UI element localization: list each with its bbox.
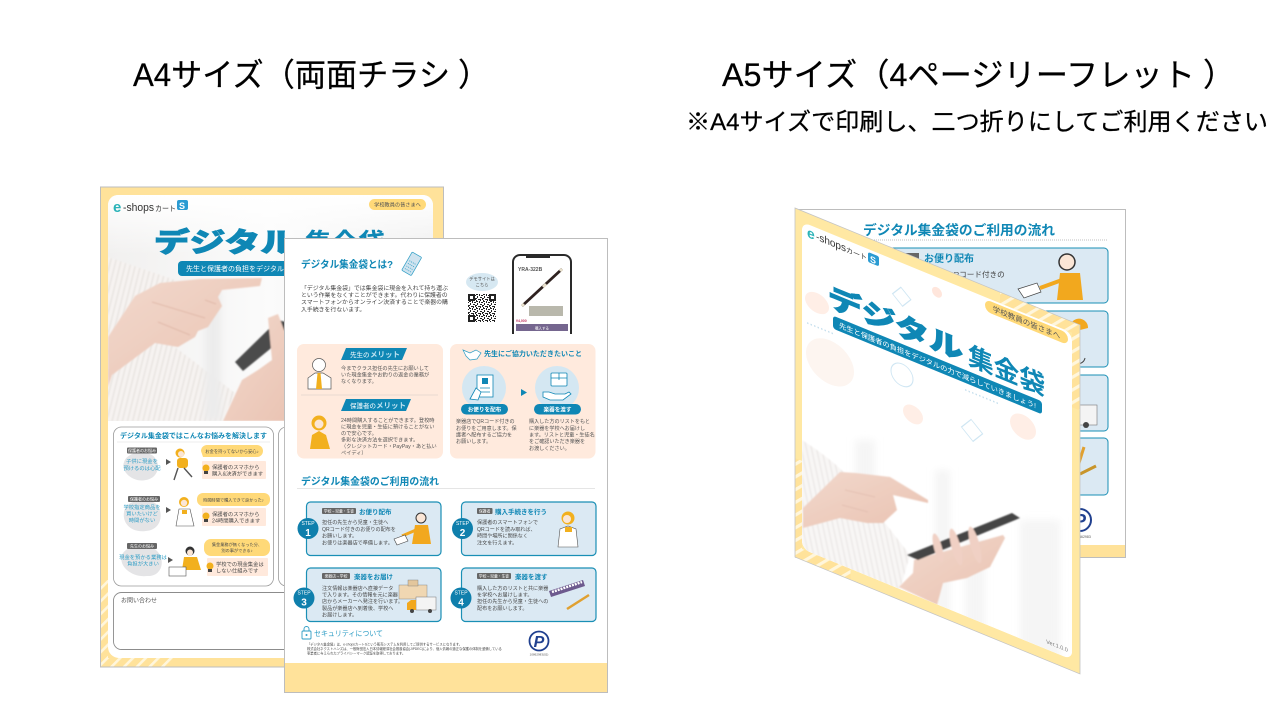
row: teacher worry: 現金を預かる業務は [119, 553, 168, 561]
heading: digital shukin-bukuro [154, 227, 385, 259]
card: step 1 [875, 248, 1108, 303]
step badge 1: STEP [301, 521, 315, 527]
step badge 3: 3 [301, 598, 307, 608]
banner: subtitle: 先生と保護者の負担をデジタルの力で減らしていきましょう! [186, 264, 377, 273]
title: A5 heading: ） [1203, 57, 1235, 93]
panel: teacher cooperation: お渡しください。 [529, 445, 570, 452]
row: teacher worry: しない仕組みです [216, 566, 258, 574]
row: parent worry 2: 24時間購入できます [212, 516, 260, 524]
card: step 1: お便り配布 [924, 252, 974, 265]
heading: security: セキュリティについて [314, 629, 383, 638]
logo: e-shops cart [807, 225, 879, 270]
row: teacher worry: 学校での現金集金は [216, 560, 264, 568]
card: step 4: 購入した方のリストと共に楽器 [477, 585, 548, 592]
panel: teacher cooperation: お願いします。 [456, 438, 491, 445]
heading: problems: デジタル集金袋ではこんなお悩みを解決します [120, 431, 267, 440]
icon: melodica and recorder [549, 580, 589, 609]
icon: privacy mark: P [1074, 511, 1087, 531]
banner: parent merit [341, 399, 411, 411]
logo: e-shops cart: S [179, 201, 185, 211]
banner: parent merit: 保護者の [350, 401, 376, 410]
banner: parent merit: メリット [376, 401, 406, 410]
row: parent worry 2: 保護者のスマホから [212, 510, 260, 518]
step badge 2: STEP [456, 521, 470, 527]
card: step 2: 保護者 [479, 509, 491, 514]
row: parent worry 2: 時間がない [129, 516, 155, 524]
row: parent worry 1: 保護者のスマホから [212, 463, 260, 471]
panel: teacher cooperation: お便りをご用意します。保 [456, 425, 517, 432]
arrow [521, 389, 527, 396]
row: parent worry 1: 購入&決済ができます [212, 470, 263, 478]
row: teacher worry: 負担が大きい [127, 560, 159, 568]
panel: teacher cooperation: 購入した方のリストをもと [529, 418, 590, 425]
row: parent worry 2: 保護者のお悩み [130, 496, 158, 502]
logo: e-shops cart: カート [155, 204, 176, 213]
callout: demo site bubble [466, 273, 498, 291]
logo: e-shops cart: e [807, 225, 815, 244]
icon: male teacher [308, 358, 331, 389]
panel: A4 front sheet [100, 187, 444, 667]
panel: merits: 今までクラス担任の先生にお願いして [341, 364, 429, 372]
row: parent worry 1: 子供に現金を [126, 457, 158, 465]
icon: woman with phone [558, 512, 578, 547]
panel: contact box: お問い合わせ [121, 596, 157, 604]
tag: for school teachers: 学校教員の皆さまへ [993, 304, 1060, 341]
heading: digital shukin-bukuro: 集金袋 [968, 340, 1045, 401]
tag: for school teachers [369, 199, 426, 210]
card: step 3: で入ります。その情報を元に楽器 [322, 592, 398, 598]
row: parent worry 1: 保護者のお悩み [128, 447, 156, 453]
smartphone mockup: YRA-322B [518, 267, 543, 273]
heading: digital shukin-bukuro: デジタル [154, 227, 296, 258]
row: teacher worry: 集金業務が無くなった分、 [212, 541, 262, 548]
panel: teacher cooperation [450, 344, 596, 458]
text: security note: 「デジタル集金袋」は、e-shopsカートSという販売システムを利用してご提供するサービスになります。 [307, 642, 462, 646]
card: step 3: 製品が楽器店へ到着後、学校へ [322, 605, 393, 612]
icon: lock [302, 626, 311, 639]
card: step 4 [875, 438, 1108, 495]
banner: teacher merit: メリット [370, 350, 400, 359]
heading: usage flow: デジタル集金袋のご利用の流れ [301, 475, 439, 488]
tag: for school teachers: 学校教員の皆さまへ [374, 200, 421, 208]
card: step 2 [875, 311, 1108, 367]
step: hand over instrument: 楽器を渡す [544, 406, 572, 414]
icon: handshake [463, 350, 481, 360]
panel: merits: 24時間購入することができます。登校時 [341, 416, 434, 424]
step badge 4: STEP [454, 590, 468, 596]
panel: merits: いた現金集金やお釣りの返金の業務が [341, 370, 430, 378]
card: step 4: 楽器を渡す [515, 572, 548, 581]
card: step 4 [462, 568, 596, 622]
icon: school and truck [399, 580, 436, 613]
panel: second box (hidden part) [278, 427, 428, 586]
banner: teacher merit [341, 348, 407, 360]
text: version: Ver.1.0.0 [1046, 639, 1068, 654]
photo: hand holding smartphone [108, 195, 433, 421]
panel: merits: に現金を児童・生徒に預けることがない [341, 422, 434, 430]
icon: privacy mark: P [534, 634, 545, 651]
logo: e-shops cart: -shops [816, 231, 846, 255]
panel: merits [297, 344, 443, 458]
icon: privacy mark: 10862983 [1075, 535, 1091, 539]
card: step 1: QRコード付きのお便りの配布を [322, 526, 396, 533]
panel: A5 cover page in perspective [795, 208, 1080, 674]
title: A4 heading: A4サイズ（両面チラシ [133, 57, 450, 93]
heading: cooperation: 先生にご協力いただきたいこと [484, 349, 582, 358]
step badge 4 [450, 588, 472, 608]
heading: digital shukin-bukuro [828, 281, 1045, 401]
title: A4 heading: ） [458, 57, 490, 93]
icon: privacy mark: 10862983(02) [530, 652, 548, 656]
card: step 2: 注文を行えます。 [477, 540, 517, 546]
card: step 1: 担任の先生から児童・生徒へ [322, 519, 388, 526]
step badge 2: 2 [460, 528, 466, 539]
panel: merits: （クレジットカード・PayPay・あと払い [341, 442, 437, 450]
tag: for school teachers [985, 299, 1068, 345]
logo: e-shops cart: -shops [123, 202, 154, 214]
text: security note: 事業者に与えられたプライバシーマーク認証を取得しております。 [307, 650, 405, 656]
text: intro paragraph: スマートフォンからオンライン決済することで楽器の購 [301, 298, 448, 306]
card: step 3: 店からメーカーへ発注を行います。 [322, 598, 403, 605]
card: step 3 [875, 375, 1108, 431]
card: step 1: お便り配布 [359, 507, 392, 516]
card: step 4: 学校→児童・生徒 [479, 574, 509, 579]
row: teacher worry: 先生のお悩み [130, 543, 154, 549]
callout: demo site bubble: デモサイトは [469, 276, 496, 282]
card: step 4: を学校へお届けします。 [477, 592, 533, 598]
logo: e-shops cart: S [870, 254, 876, 266]
banner: teacher merit: 先生の [350, 350, 370, 359]
title: A5 heading: A5サイズ（4ページリーフレット [722, 57, 1195, 93]
step: distribute letter [461, 366, 508, 414]
card: step 4: 担任の先生から児童・生徒への [477, 598, 548, 605]
panel: teacher cooperation: ます。リストと児童・生徒名 [529, 432, 595, 438]
step badge 1: 1 [305, 528, 311, 539]
panel: merits: 多彩な決済方法を選択できます。 [341, 436, 418, 444]
icon: privacy mark [530, 632, 548, 656]
smartphone mockup: ¥4,000 [516, 319, 527, 323]
heading: usage flow: デジタル集金袋のご利用の流れ [863, 222, 1056, 238]
card: step 1: お便りは楽器店で準備します。 [322, 540, 393, 546]
step badge 2 [452, 518, 473, 539]
card: step 2: 購入手続きを行う [495, 507, 547, 516]
card: step 3 [306, 568, 441, 622]
decorative: pale shapes [805, 233, 1036, 474]
banner: subtitle: 先生と保護者の負担をデジタルの力で減らしていきましょう! [839, 321, 1036, 410]
card: step 1: 生徒へQRコード付きの [925, 269, 1005, 279]
step: distribute letter: お便りを配布 [468, 406, 502, 414]
smartphone mockup: 購入する [535, 325, 549, 330]
row: parent worry 1: お金を持ってないから安心♪ [205, 448, 259, 455]
logo: e-shops cart: カート [846, 245, 867, 262]
card: step 1: 学校→児童・生徒 [324, 509, 354, 514]
panel: teacher cooperation: に楽器を学校へお届けし [529, 425, 585, 432]
panel: contact box [114, 592, 428, 650]
card: step 4: 配布をお願いします。 [477, 605, 527, 612]
panel: merits: ペイディ） [341, 448, 367, 456]
icon: female parent [310, 416, 330, 449]
row: parent worry 1 [123, 445, 266, 481]
card: step 2: QRコードを読み取れば、 [477, 526, 536, 533]
logo: e-shops cart: e [113, 199, 121, 216]
card: step 2 [462, 502, 596, 556]
panel: merits: ので安心です。 [341, 429, 377, 437]
heading: digital shukin-bukuro: 集金袋 [305, 229, 385, 259]
step: hand over instrument [534, 366, 581, 414]
card: step 3: 注文情報は楽器店へ直接データ [322, 585, 393, 592]
step badge 3 [294, 588, 314, 608]
panel: teacher cooperation: をご確認いただき楽器を [529, 438, 585, 445]
panel: problems solved [114, 427, 274, 586]
icon: calculator and card [402, 252, 422, 276]
card: step 2: 時間や場所に関係なく [477, 532, 528, 540]
card: step 3: お届けします。 [322, 612, 357, 618]
photo: hand holding smartphone [802, 420, 1072, 660]
row: teacher worry: 別の事ができる♪ [221, 547, 253, 554]
panel: teacher cooperation: 護者へ配布するご協力を [456, 432, 512, 438]
card: step 1 [306, 502, 441, 556]
text: security note: 株式会社ネクストハンズは、一般財団法人日本情報経済社会推進協会(JIPDEC)により、個人情報の適正な保護の体制を整備している [307, 646, 502, 651]
step badge 3: STEP [297, 590, 311, 596]
panel: A5 inside page [796, 210, 1126, 558]
card: step 1: お願いします。 [322, 532, 357, 540]
row: parent worry 2: 学校指定商品を [123, 503, 161, 511]
smartphone mockup [512, 254, 572, 334]
card: step 2: 保護者のスマートフォンで [477, 519, 538, 526]
row: parent worry 2: 時間時間で購入できて良かった♪ [203, 496, 264, 504]
banner: subtitle [178, 261, 393, 276]
qr code [468, 294, 496, 322]
row: parent worry 2: 買いたいけど [126, 510, 159, 518]
step badge 4: 4 [458, 598, 464, 608]
icon: privacy mark [1069, 509, 1091, 539]
text: intro paragraph: という作業をなくすことができます。代わりに保護者の [301, 291, 448, 299]
card: step 3: 楽器をお届け [354, 572, 393, 581]
text: intro paragraph: 「デジタル集金袋」では集金袋に現金を入れて持ち運ぶ [301, 284, 448, 292]
heading: what is it: デジタル集金袋とは? [301, 258, 393, 271]
subtitle: A5 printing note: ※A4サイズで印刷し、二つ折りにしてご利用ください [686, 109, 1268, 136]
logo: e-shops cart [113, 199, 188, 216]
panel: merits: なくなります。 [341, 378, 377, 385]
heading: digital shukin-bukuro: デジタル [828, 281, 963, 367]
icon: man handing letter [394, 513, 431, 545]
panel: A4 back sheet [284, 238, 608, 692]
card: step 3: 楽器店→学校 [325, 574, 348, 579]
row: parent worry 2 [123, 493, 270, 531]
callout: demo site bubble: こちら [476, 282, 488, 288]
step badge 1 [298, 518, 318, 539]
text: intro paragraph: 入手続きを行ないます。 [301, 306, 365, 314]
panel: teacher cooperation: 楽器店でQRコード付きの [456, 418, 515, 425]
row: parent worry 1: 預けるのは心配 [123, 464, 161, 472]
row: teacher worry [119, 539, 270, 576]
